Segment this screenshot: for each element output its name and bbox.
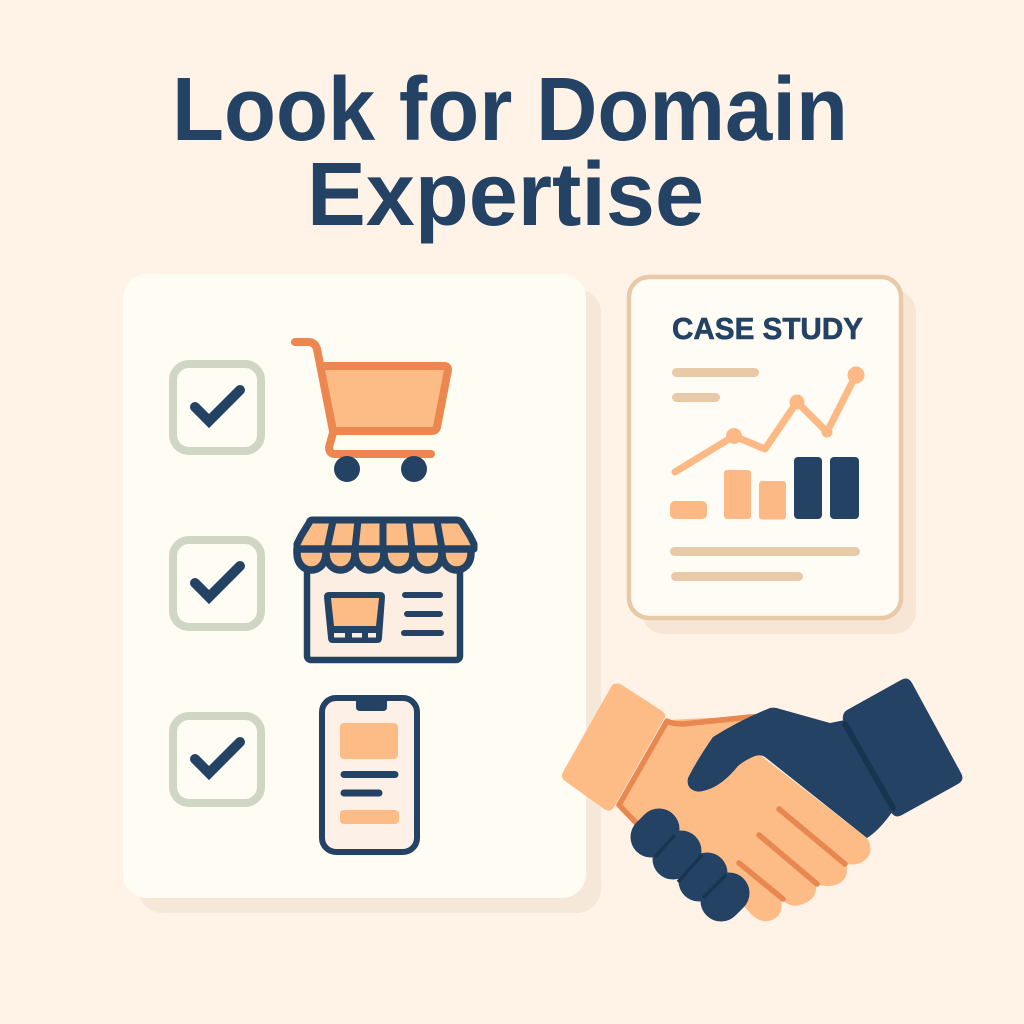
light cuff (562, 683, 665, 811)
checkbox 2 (173, 540, 261, 627)
light hand (618, 716, 871, 921)
card heading: CASE STUDY (672, 311, 863, 346)
title: Look for Domain (172, 60, 848, 160)
dark fingers (651, 829, 729, 901)
icon: storefront (297, 520, 474, 660)
text placeholder lines (670, 368, 860, 581)
line chart (675, 366, 864, 472)
icon: smartphone (322, 698, 417, 852)
dark hand (688, 708, 895, 838)
panel: checklist (123, 274, 601, 913)
title: Expertise (307, 145, 704, 245)
bar chart (670, 457, 859, 520)
finger separators (655, 835, 726, 898)
icon: shopping cart (295, 342, 448, 482)
icon: handshake (562, 679, 962, 921)
dark cuff (843, 679, 962, 816)
light hand outlines (619, 716, 845, 899)
checkbox 1 (173, 364, 261, 451)
wrist crease (845, 724, 893, 808)
panel: case study card (629, 277, 916, 634)
checkbox 3 (173, 716, 261, 803)
title (172, 60, 848, 245)
